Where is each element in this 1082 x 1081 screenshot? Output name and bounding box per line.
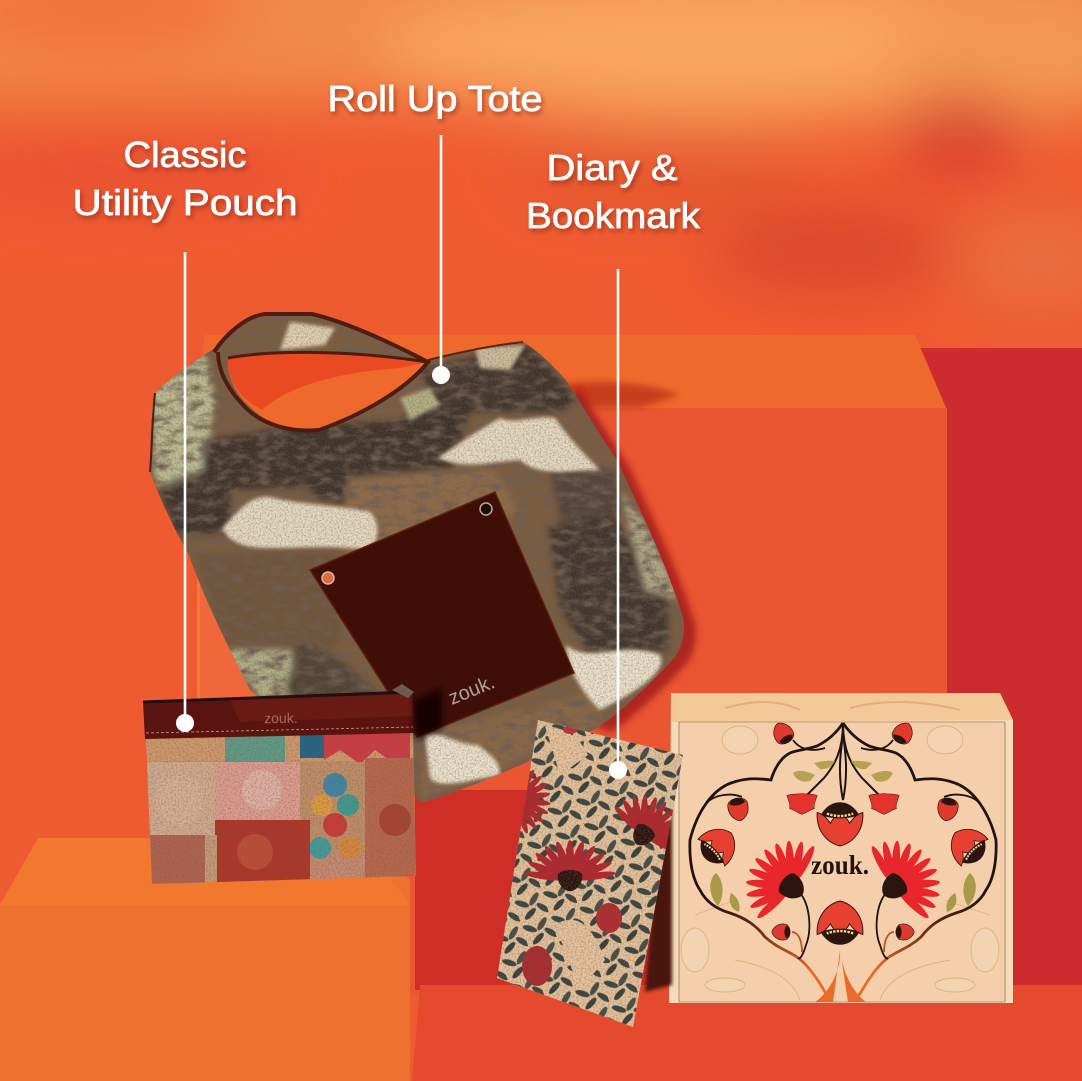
box lid xyxy=(671,693,1013,722)
right wall in shadow xyxy=(915,348,1082,1081)
callout: roll up tote xyxy=(328,78,542,384)
box logo: zouk. xyxy=(811,850,869,880)
callout: classic utility pouch: Utility Pouch xyxy=(72,182,298,223)
lower-left plinth block xyxy=(0,838,410,1081)
handle piping xyxy=(214,314,428,431)
diary flowers xyxy=(497,720,682,1027)
pocket logo: zouk. xyxy=(445,671,498,710)
tote bag xyxy=(140,310,690,810)
shadow between diary and box xyxy=(645,790,672,992)
box artwork right half xyxy=(840,719,996,1002)
callout: diary and bookmark: Bookmark xyxy=(526,195,701,236)
box front face xyxy=(679,722,1005,1002)
leather pocket xyxy=(310,492,574,737)
diary with floral cover xyxy=(497,720,683,1027)
callout: diary and bookmark: Diary & xyxy=(546,147,678,188)
callout: classic utility pouch xyxy=(72,134,298,732)
callout: roll up tote: Roll Up Tote xyxy=(328,78,542,119)
bag dye pattern xyxy=(140,310,690,810)
utility pouch xyxy=(140,684,442,890)
pouch logo: zouk. xyxy=(264,710,298,726)
handle opening xyxy=(228,352,428,428)
centre plinth block xyxy=(195,335,947,995)
box artwork left half xyxy=(690,719,846,1002)
callout: diary and bookmark xyxy=(526,147,701,779)
pouch zip pull xyxy=(392,684,414,698)
pouch leather band xyxy=(143,692,414,739)
box faint florals xyxy=(681,726,999,1000)
gift box xyxy=(669,693,1013,1003)
floor block xyxy=(412,985,1082,1081)
pouch fabric patches xyxy=(146,733,416,884)
callout: classic utility pouch: Classic xyxy=(124,134,246,175)
box centre lotus flowers xyxy=(815,802,866,1002)
